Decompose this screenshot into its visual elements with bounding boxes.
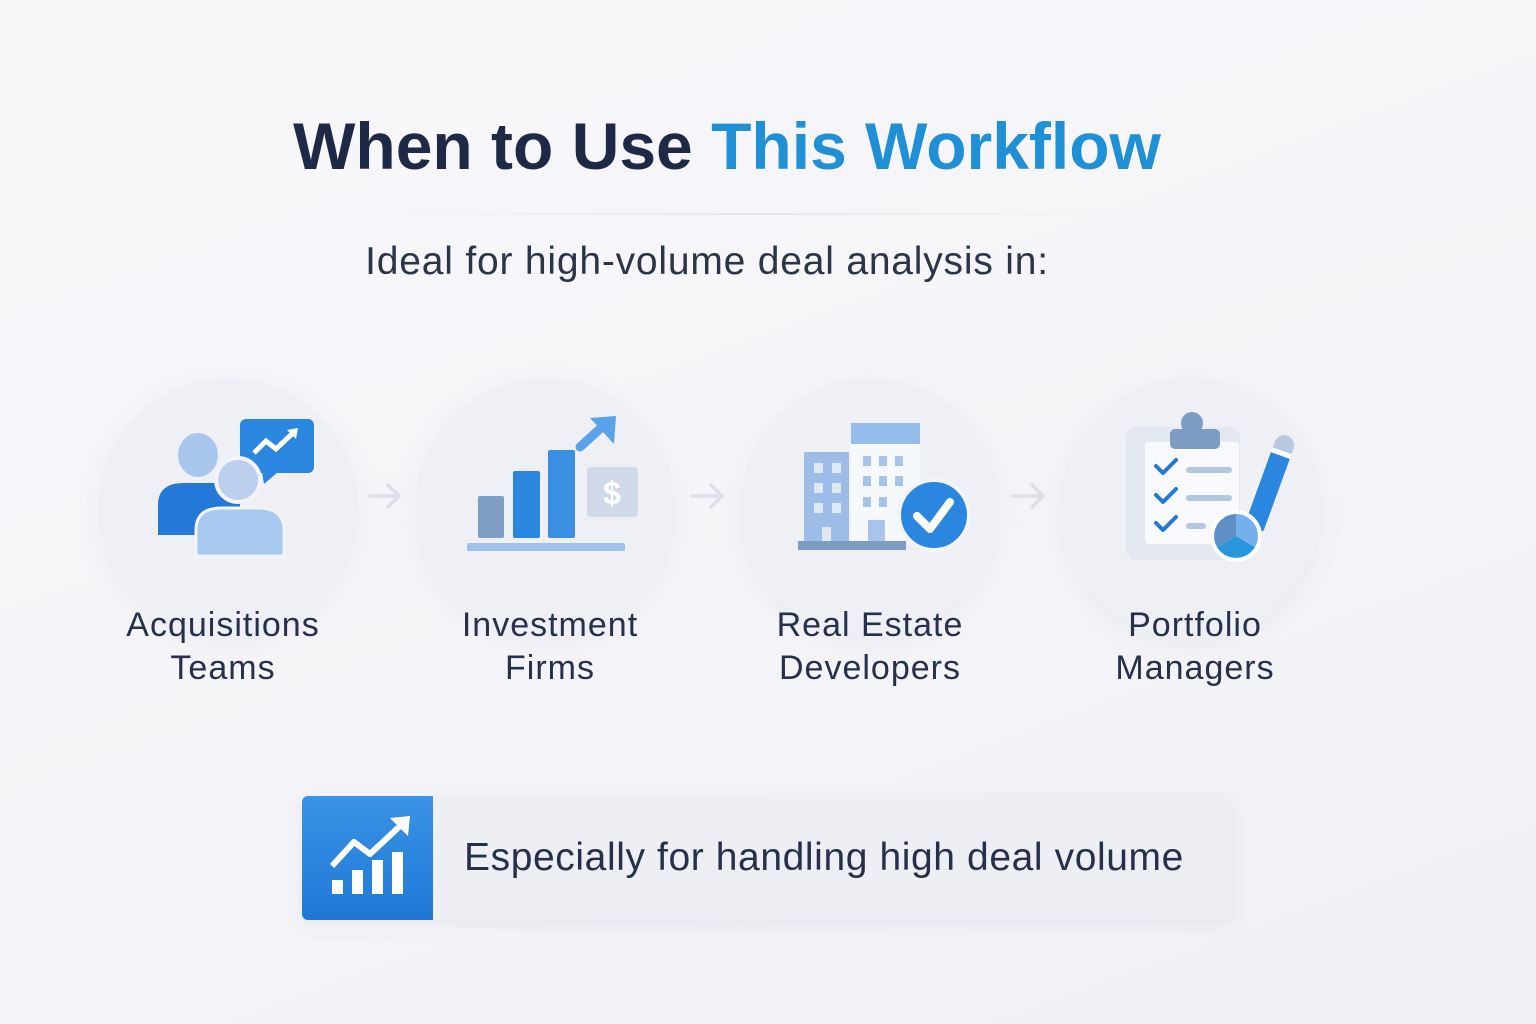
- icon circle: [415, 378, 675, 638]
- icon: people with chart bubble: [158, 419, 314, 554]
- title: When to Use This Workflow: [293, 109, 1161, 183]
- callout: high deal volume: [302, 796, 1232, 920]
- label: Investment: [462, 606, 638, 644]
- arrow 3: [1011, 483, 1046, 509]
- icon circle: [740, 378, 1000, 638]
- label: Portfolio: [1128, 606, 1262, 644]
- callout text: Especially for handling high deal volume: [464, 836, 1184, 879]
- icon circle: [98, 378, 358, 638]
- label: Managers: [1115, 649, 1275, 687]
- icon: bar chart with dollar: $: [603, 475, 621, 511]
- label: [777, 606, 963, 687]
- panel: real estate developers: [777, 423, 967, 687]
- icon: growth chart: [302, 796, 433, 920]
- icon: clipboard with checks: [1126, 412, 1294, 562]
- label: [126, 606, 320, 687]
- subtitle: Ideal for high-volume deal analysis in:: [365, 240, 1049, 283]
- divider: [370, 213, 1140, 215]
- panel: portfolio managers: [1115, 412, 1294, 687]
- label: Teams: [170, 649, 276, 687]
- panel: investment firms: [462, 416, 638, 687]
- icon circle: [1060, 378, 1320, 638]
- label: [1115, 606, 1275, 687]
- label: Firms: [505, 649, 595, 687]
- label: Developers: [779, 649, 961, 687]
- arrow 2: [690, 483, 724, 509]
- arrow 1: [367, 483, 402, 509]
- icon: bar chart with dollar: [467, 416, 638, 551]
- label: Real Estate: [777, 606, 963, 644]
- label: [462, 606, 638, 687]
- label: Acquisitions: [126, 606, 320, 644]
- panel: acquisitions teams: [126, 419, 320, 687]
- icon: buildings with check: [798, 423, 967, 550]
